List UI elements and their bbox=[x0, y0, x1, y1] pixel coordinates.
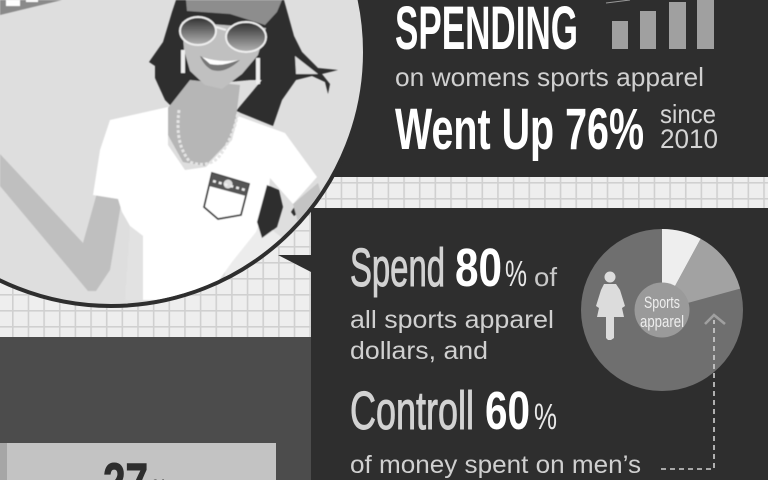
panel: right statistics panel bbox=[311, 208, 768, 480]
label: sports apparel: Sports bbox=[644, 293, 680, 312]
text: spend 80 percent of: of bbox=[534, 262, 558, 292]
label: sports apparel: apparel bbox=[640, 312, 684, 331]
forearm bbox=[293, 183, 322, 222]
text: since 2010: since bbox=[660, 99, 716, 129]
sunglasses bbox=[180, 17, 266, 52]
speech bubble pointer bbox=[278, 255, 311, 272]
text: controll 60 percent: 60 bbox=[485, 381, 530, 441]
sign held in hand bbox=[0, 0, 62, 15]
raised arm bbox=[0, 154, 122, 291]
shield logo bbox=[204, 173, 249, 219]
hair bbox=[149, 0, 338, 126]
lower torso light shading bbox=[224, 226, 282, 277]
label: sports apparel bbox=[640, 293, 684, 331]
shirt side shading bbox=[125, 226, 143, 300]
neck and chest bbox=[168, 80, 240, 166]
illustration: woman in circle bbox=[0, 0, 365, 306]
arrow: dashed pointer to pie bbox=[661, 315, 725, 469]
pie chart: sports apparel bbox=[581, 229, 743, 391]
face bbox=[182, 22, 266, 89]
text: spend 80 percent of: % bbox=[505, 253, 527, 294]
hair behind arm bbox=[257, 185, 283, 238]
text: since 2010: 2010 bbox=[660, 124, 718, 154]
text: controll 60 percent: Controll bbox=[350, 381, 474, 441]
stat: 27 percent bbox=[104, 462, 164, 480]
text: controll 60 percent: % bbox=[534, 396, 557, 437]
text: spend 80 percent of: 80 bbox=[455, 238, 502, 298]
panel: lower statistic area bbox=[0, 337, 311, 480]
icon: woman bbox=[596, 272, 625, 340]
panel: graph paper band bbox=[0, 177, 768, 338]
hand detail bbox=[291, 206, 297, 216]
cap bbox=[186, 0, 282, 25]
earrings bbox=[181, 50, 260, 84]
hair gap wedge bbox=[295, 56, 318, 74]
shirt bbox=[93, 107, 317, 300]
text: since 2010 bbox=[660, 99, 718, 154]
text: of money spent on men's: of money spent on men’s bbox=[350, 451, 641, 479]
text: all sports apparel dollars, and bbox=[350, 306, 554, 365]
necklace bbox=[178, 110, 238, 164]
text: spend 80 percent of: Spend bbox=[350, 238, 445, 298]
text: on womens sports apparel: on womens sports apparel bbox=[395, 62, 704, 92]
icon: rising bar chart bbox=[606, 0, 714, 49]
text: went up 76 percent: Went Up 76% bbox=[395, 97, 644, 162]
text: all sports apparel dollars, and: all sports apparel bbox=[350, 306, 554, 334]
text: all sports apparel dollars, and: dollars, and bbox=[350, 337, 488, 365]
mouth bbox=[200, 56, 240, 71]
